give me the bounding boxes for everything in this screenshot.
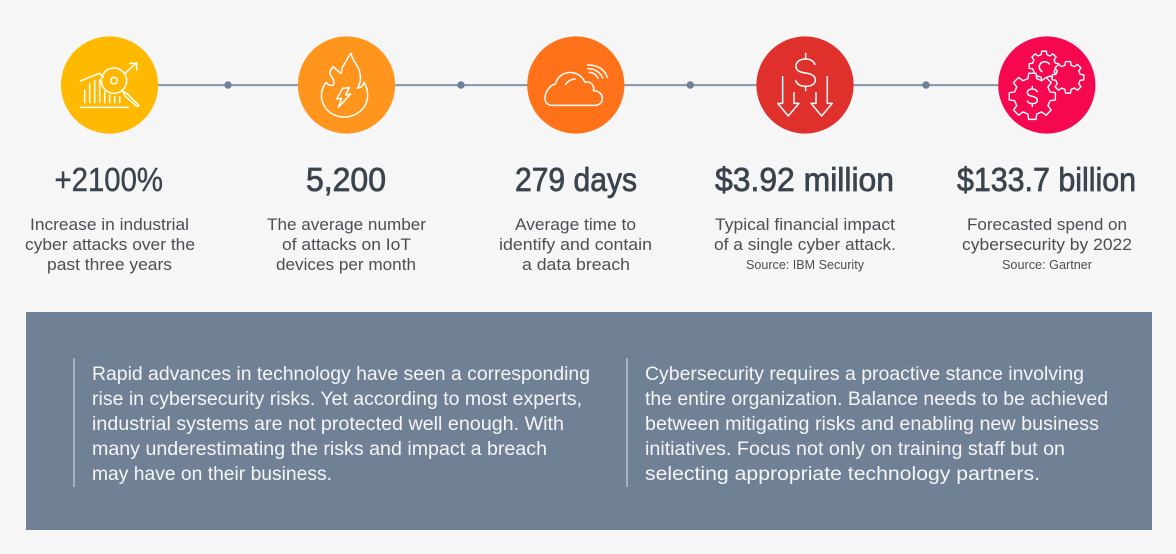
description: time to contain: identify and contain [499, 235, 652, 254]
description: IoT attacks: of attacks on IoT [282, 235, 411, 254]
text block: rapid advances: Rapid advances in technology have seen a corresponding [92, 364, 590, 385]
text block: proactive stance: selecting appropriate technology partners. [645, 464, 1040, 485]
icon: cloud with signal [527, 36, 624, 134]
description: IoT attacks [267, 215, 426, 274]
text block: proactive stance: initiatives. Focus not only on training staff but on [645, 439, 1065, 460]
description: financial impact: of a single cyber attack. [714, 235, 896, 254]
description: forecasted spend: cybersecurity by 2022 [962, 235, 1132, 254]
text block: rapid advances: may have on their business. [92, 464, 332, 485]
description: IoT attacks: The average number [267, 215, 426, 234]
description: industrial attacks: Increase in industrial [30, 215, 189, 234]
icon: dollar with falling arrows [756, 36, 854, 134]
description: financial impact: Source: IBM Security [746, 258, 865, 272]
text block: rapid advances: many underestimating the risks and impact a breach [92, 439, 547, 460]
description: industrial attacks: cyber attacks over the [25, 235, 195, 254]
description: forecasted spend: Forecasted spend on [967, 215, 1127, 234]
stat: 5,200: 5,200 [306, 161, 386, 198]
text block: proactive stance: the entire organization. Balance needs to be achieved [645, 389, 1108, 410]
description: forecasted spend [962, 215, 1132, 272]
icon: flame with lightning bolt [298, 36, 395, 134]
icon: chart with magnifier [61, 36, 158, 134]
timeline connector [150, 81, 1010, 89]
description: time to contain [499, 215, 652, 274]
description: industrial attacks [25, 215, 195, 274]
stat: +2100%: +2100% [54, 161, 163, 198]
icon: gears with dollar [998, 36, 1095, 134]
text block: rapid advances: industrial systems are not protected well enough. With [92, 414, 564, 435]
description: financial impact [714, 215, 896, 272]
description: industrial attacks: past three years [47, 255, 172, 274]
description: time to contain: Average time to [515, 215, 636, 234]
text block: proactive stance [626, 358, 1108, 487]
text block: proactive stance: Cybersecurity requires a proactive stance involving [645, 364, 1084, 385]
text block: rapid advances: rise in cybersecurity risks. Yet according to most experts, [92, 389, 582, 410]
description: financial impact: Typical financial impact [715, 215, 895, 234]
description: time to contain: a data breach [522, 255, 630, 274]
text block: rapid advances [74, 358, 590, 487]
description: forecasted spend: Source: Gartner [1002, 258, 1092, 272]
panel: commentary [26, 312, 1152, 530]
description: IoT attacks: devices per month [276, 255, 416, 274]
stat: $133.7 billion: $133.7 billion [957, 161, 1136, 198]
stat: 279 days: 279 days [515, 161, 637, 198]
text block: proactive stance: between mitigating risks and enabling new business [645, 414, 1099, 435]
stat: $3.92 million: $3.92 million [715, 161, 894, 198]
